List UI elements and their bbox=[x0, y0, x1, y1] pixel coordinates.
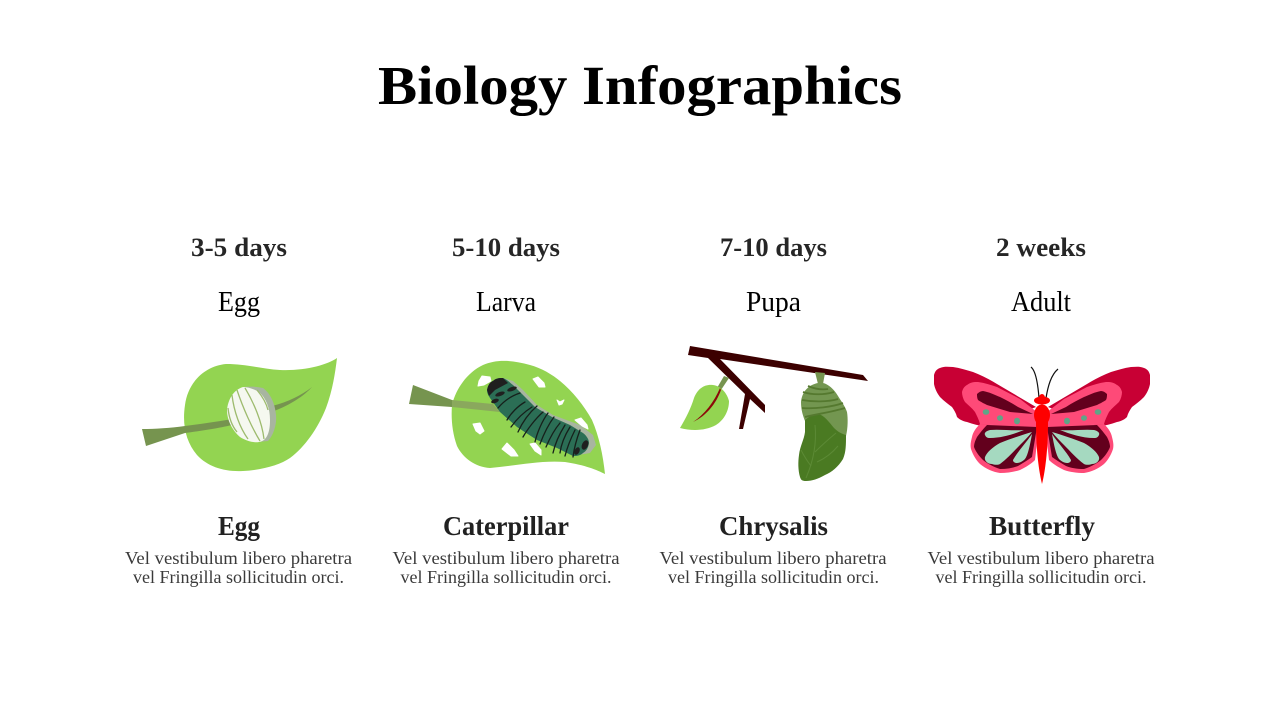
icon: butterfly bbox=[934, 367, 1150, 484]
description: butterfly bbox=[928, 548, 1155, 587]
description: chrysalis: vel Fringilla sollicitudin orci. bbox=[668, 567, 879, 587]
duration: adult: 2 weeks bbox=[996, 233, 1086, 262]
description: egg: vel Fringilla sollicitudin orci. bbox=[133, 567, 344, 587]
stage label: larva: Larva bbox=[476, 287, 537, 318]
caption: butterfly: Butterfly bbox=[989, 511, 1096, 541]
description: chrysalis bbox=[660, 548, 887, 587]
duration: larva: 5-10 days bbox=[452, 233, 560, 262]
caption: chrysalis: Chrysalis bbox=[719, 511, 828, 541]
description: caterpillar: vel Fringilla sollicitudin orci. bbox=[400, 567, 612, 587]
panel: adult stage bbox=[928, 233, 1155, 587]
panel: pupa stage bbox=[660, 233, 887, 587]
description: egg: Vel vestibulum libero pharetra bbox=[125, 548, 352, 568]
title: Biology Infographics bbox=[378, 55, 902, 116]
icon: egg on leaf bbox=[142, 358, 337, 471]
caption: egg: Egg bbox=[218, 511, 260, 541]
panel: egg stage bbox=[125, 233, 352, 587]
icon: chrysalis on branch bbox=[680, 346, 868, 481]
panel: larva stage bbox=[392, 233, 620, 587]
description: caterpillar: Vel vestibulum libero pharetra bbox=[392, 548, 620, 568]
description: chrysalis: Vel vestibulum libero pharetra bbox=[660, 548, 887, 568]
description: butterfly: Vel vestibulum libero pharetra bbox=[928, 548, 1155, 568]
caption: caterpillar: Caterpillar bbox=[443, 511, 569, 541]
icon: caterpillar on leaf bbox=[409, 361, 605, 474]
description: butterfly: vel Fringilla sollicitudin orci. bbox=[936, 567, 1146, 587]
description: caterpillar bbox=[392, 548, 620, 587]
stage label: pupa: Pupa bbox=[746, 287, 802, 318]
description: egg bbox=[125, 548, 352, 587]
stage label: egg: Egg bbox=[218, 287, 260, 318]
duration: egg: 3-5 days bbox=[191, 233, 287, 262]
duration: pupa: 7-10 days bbox=[720, 233, 827, 262]
stage label: adult: Adult bbox=[1011, 287, 1071, 318]
